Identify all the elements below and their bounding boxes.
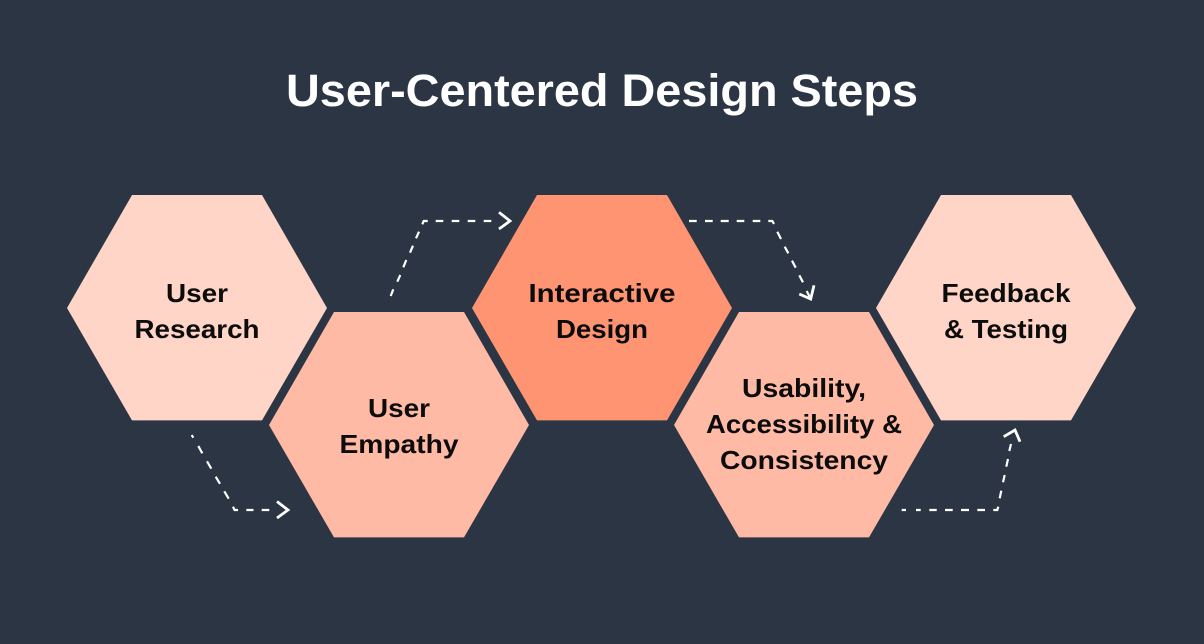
arrow: interactive to usability bbox=[689, 221, 814, 299]
hexagon: User Empathy bbox=[269, 312, 529, 537]
hexagon: Feedback & Testing bbox=[876, 195, 1136, 420]
hexagon: Usability, Accessibility & Consistency bbox=[674, 312, 934, 537]
hexagon: Interactive Design: Interactive bbox=[528, 278, 676, 308]
hexagon: Usability, Accessibility & Consistency: Usability, bbox=[742, 373, 866, 403]
arrow: usability to feedback bbox=[902, 430, 1020, 510]
hexagon: Usability, Accessibility & Consistency: Accessibility & bbox=[706, 409, 902, 439]
title: User-Centered Design Steps bbox=[286, 65, 918, 116]
hexagon: Interactive Design bbox=[472, 195, 732, 420]
hexagon: User Research: User bbox=[166, 278, 228, 308]
hexagon: User Empathy: User bbox=[368, 393, 430, 423]
hexagon: Usability, Accessibility & Consistency: Consistency bbox=[720, 445, 889, 475]
arrow: research to empathy bbox=[192, 435, 288, 518]
hexagon: User Research: Research bbox=[134, 314, 260, 344]
hexagon: User Research bbox=[67, 195, 327, 420]
hexagon: User Empathy: Empathy bbox=[340, 429, 459, 459]
hexagon: Feedback & Testing: Feedback bbox=[942, 278, 1071, 308]
arrow: empathy to interactive bbox=[391, 212, 510, 296]
hexagon: Feedback & Testing: & Testing bbox=[944, 314, 1068, 344]
hexagon: Interactive Design: Design bbox=[556, 314, 648, 344]
